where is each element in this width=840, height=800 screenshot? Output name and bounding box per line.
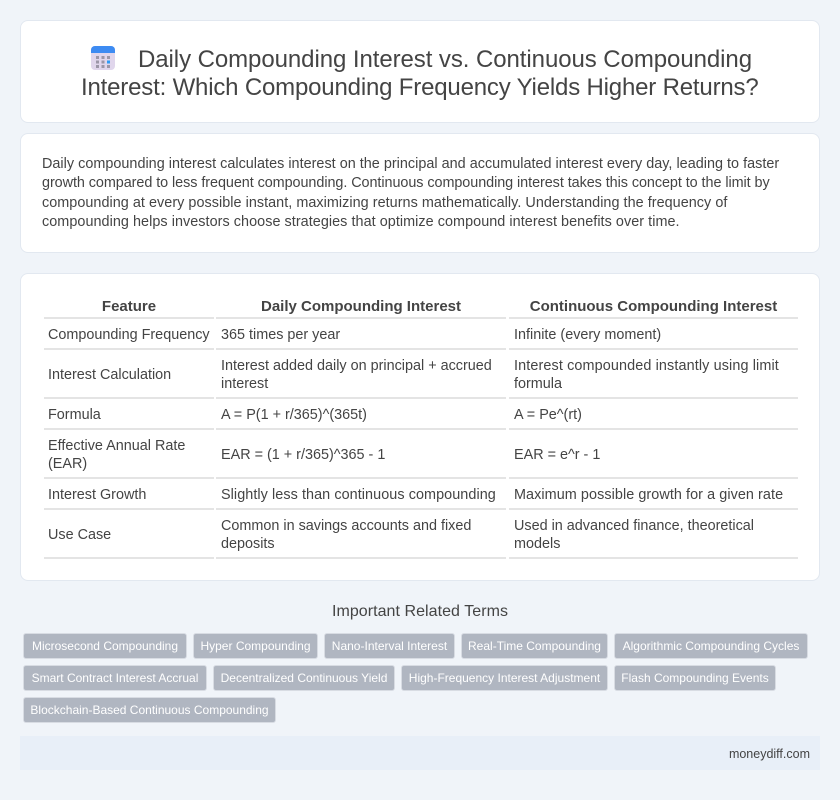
tag: [193, 633, 318, 659]
tag: Flash Compounding Events: [621, 671, 769, 685]
row: use case: Common in savings accounts and fixed: [221, 518, 471, 534]
row: use case: Use Case: [48, 527, 111, 543]
icon: calendar: [91, 46, 115, 70]
row: use case: Used in advanced finance, theoretical: [514, 518, 754, 534]
footer: [20, 736, 820, 770]
row: interest calculation: Interest Calculation: [48, 367, 171, 383]
row: interest growth: Slightly less than continuous compounding: [221, 487, 496, 503]
row: interest growth: [48, 487, 783, 503]
row: effective annual rate: Effective Annual Rate: [48, 438, 185, 454]
heading: important related terms: Important Related Terms: [332, 603, 508, 620]
row: interest calculation: formula: [514, 376, 562, 392]
row: compounding frequency: 365 times per year: [221, 327, 340, 343]
row: formula: Formula: [48, 407, 101, 423]
tag: [23, 665, 207, 691]
row: effective annual rate: (EAR): [48, 456, 87, 472]
row: effective annual rate: [48, 438, 600, 472]
row: interest calculation: interest: [221, 376, 268, 392]
row: effective annual rate: EAR = e^r - 1: [514, 447, 600, 463]
tag: [324, 633, 455, 659]
tag: [213, 665, 395, 691]
tag: Smart Contract Interest Accrual: [32, 671, 198, 685]
row: compounding frequency: Infinite (every moment): [514, 327, 661, 343]
row: interest calculation: Interest added daily on principal + accrued: [221, 358, 492, 374]
panel: comparison table: [20, 273, 820, 581]
tag: Blockchain-Based Continuous Compounding: [30, 703, 269, 717]
row: formula: [48, 407, 582, 423]
tag: [614, 633, 808, 659]
tag: Microsecond Compounding: [32, 639, 178, 653]
row: formula: A = Pe^(rt): [514, 407, 582, 423]
tag: [461, 633, 608, 659]
paragraph text: compounding helps investors choose strategies that optimize compound interest benefits over time.: [42, 214, 680, 230]
tag: [23, 697, 276, 723]
related terms tags: [23, 633, 808, 723]
title text: [81, 46, 759, 101]
row: interest growth: Interest Growth: [48, 487, 146, 503]
row: use case: [48, 518, 754, 552]
tag: [614, 665, 776, 691]
table header: Continuous Compounding Interest: [530, 298, 777, 315]
panel: intro paragraph: [20, 133, 820, 253]
paragraph text: [42, 156, 779, 230]
title text: Daily Compounding Interest vs. Continuous Compounding: [138, 46, 752, 73]
title text: Interest: Which Compounding Frequency Yields Higher Returns?: [81, 74, 759, 101]
row: use case: models: [514, 536, 560, 552]
tag: Hyper Compounding: [200, 639, 311, 653]
row: compounding frequency: Compounding Frequency: [48, 327, 210, 343]
paragraph text: compounding at every possible instant, maximizing returns mathematically. Understanding the frequency of: [42, 195, 727, 211]
table header: Daily Compounding Interest: [261, 298, 461, 315]
tag: High-Frequency Interest Adjustment: [409, 671, 600, 685]
table header: Feature: [102, 298, 156, 315]
paragraph text: Daily compounding interest calculates interest on the principal and accumulated interest every day, leading to faster: [42, 156, 779, 172]
tag: Algorithmic Compounding Cycles: [623, 639, 799, 653]
tag: Decentralized Continuous Yield: [221, 671, 387, 685]
footer source: moneydiff.com: [729, 747, 810, 761]
row: effective annual rate: EAR = (1 + r/365)^365 - 1: [221, 447, 385, 463]
table header: [102, 298, 778, 315]
tag: [401, 665, 608, 691]
row: interest calculation: Interest compounded instantly using limit: [514, 358, 779, 374]
row: compounding frequency: [48, 327, 661, 343]
row: use case: deposits: [221, 536, 275, 552]
row: formula: A = P(1 + r/365)^(365t): [221, 407, 367, 423]
row: interest growth: Maximum possible growth for a given rate: [514, 487, 783, 503]
panel: title: [20, 20, 820, 123]
tag: [23, 633, 187, 659]
tag: Nano-Interval Interest: [332, 639, 447, 653]
tag: Real-Time Compounding: [468, 639, 601, 653]
row: interest calculation: [48, 358, 779, 392]
paragraph text: growth compared to less frequent compounding. Continuous compounding interest takes this concept to the limit by: [42, 175, 770, 191]
